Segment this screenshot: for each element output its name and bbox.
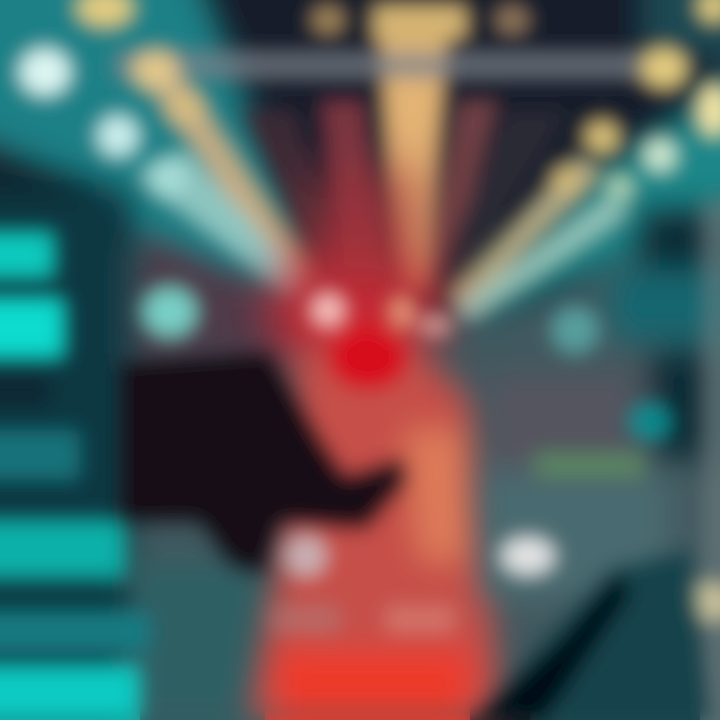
dark maroon wall left of centre — [130, 235, 300, 360]
bottom edge backing strip — [0, 680, 720, 720]
right teal wedge — [460, 0, 720, 325]
floor white reflections — [270, 534, 556, 633]
dark band under left wedge — [0, 130, 130, 245]
horizontal grey beam — [115, 52, 645, 78]
left wall dark column — [0, 190, 130, 720]
ray fan — [135, 30, 632, 322]
left teal wedge — [0, 0, 320, 310]
right side accents — [535, 200, 720, 720]
ceiling lights row — [75, 0, 720, 155]
lower left floor — [130, 560, 270, 720]
bottom right dark wedge — [470, 550, 710, 720]
left cyan panels — [0, 232, 198, 720]
red floor column — [250, 340, 500, 720]
right side floor and wall — [480, 210, 720, 600]
central red orb and sparks — [311, 293, 453, 388]
upper dark backdrop — [140, 0, 720, 330]
central red glow — [270, 170, 440, 378]
teal-white lights — [18, 47, 678, 202]
black silhouette — [120, 352, 405, 575]
